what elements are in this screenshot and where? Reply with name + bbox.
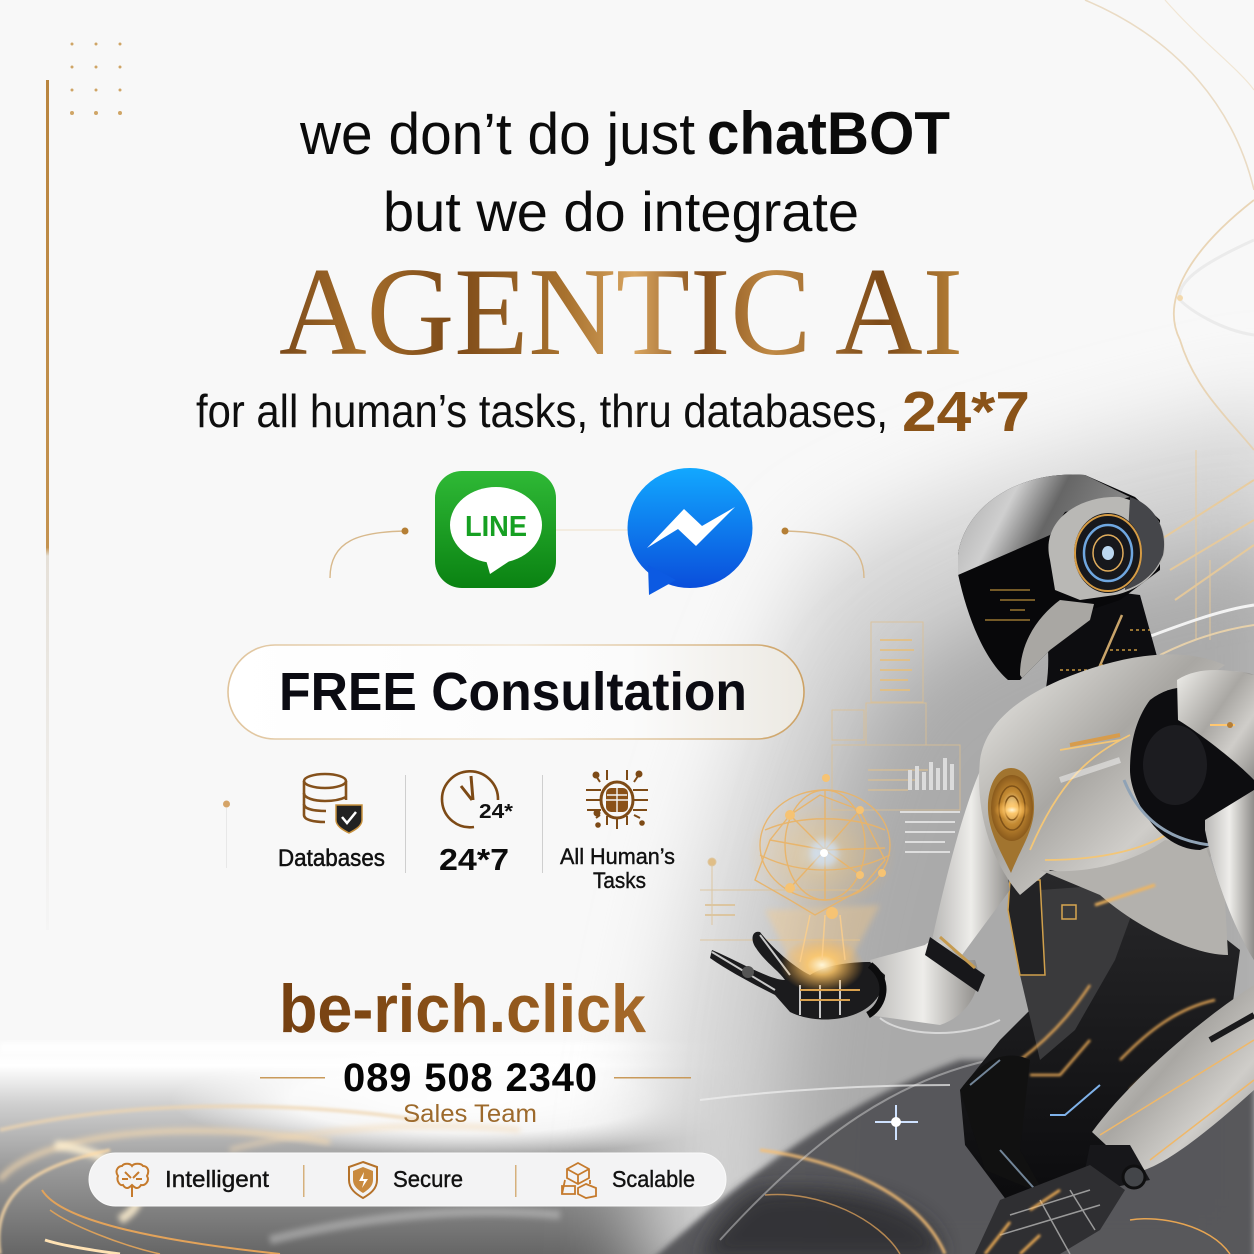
robot: open hand (710, 932, 885, 1020)
robot: lower arm and hand (975, 985, 1254, 1254)
connector lines (330, 528, 864, 578)
website: be-rich.click (279, 971, 646, 1047)
data panels behind robot (700, 622, 960, 940)
icon: shield (349, 1162, 377, 1198)
feature: 24*7: 24*7 (439, 842, 509, 877)
feature: 24*7 (439, 771, 513, 877)
icon: brain (117, 1164, 148, 1197)
hologram globe (747, 774, 897, 993)
feature: All Human's Tasks: All Human’s (560, 844, 675, 869)
feature: Databases: Databases (278, 845, 385, 872)
icon: LINE (435, 471, 556, 588)
icon: LINE: LINE (465, 511, 527, 543)
right background light streaks (1140, 450, 1254, 655)
headline (299, 100, 950, 243)
bottom pill (89, 1153, 726, 1206)
robot: neck (1020, 590, 1170, 760)
title: AGENTIC AI: AGENTIC AI (279, 243, 963, 382)
icon: Messenger (628, 468, 752, 595)
robot: rear arm (1177, 671, 1254, 960)
robot: chest emblem (960, 768, 1080, 873)
light flare (875, 1105, 918, 1140)
feature: Databases (278, 774, 385, 872)
floor with swirling light (0, 1060, 1254, 1254)
headline: chatBOT (707, 100, 950, 167)
phone number: 089 508 2340 (343, 1056, 597, 1100)
robot: near arm (868, 760, 1010, 1033)
bottom pill: Secure (393, 1166, 463, 1192)
bottom pill: Intelligent (165, 1166, 270, 1192)
icon: boxes (562, 1163, 596, 1198)
headline: but we do integrate (383, 180, 859, 243)
dot grid (70, 42, 122, 115)
subtitle: 24*7 (902, 380, 1030, 444)
robot: ear ring (1074, 513, 1142, 593)
left accent dot (223, 800, 230, 868)
robot: helmet (958, 475, 1165, 680)
sales team label: Sales Team (403, 1100, 537, 1128)
subtitle: for all human’s tasks, thru databases, (196, 385, 888, 437)
robot: dark torso (960, 840, 1240, 1205)
icon: clock: 24* (479, 801, 513, 823)
feature: All Human's Tasks (560, 770, 675, 893)
dark swoop under the robot (640, 1060, 1254, 1254)
pill: FREE Consultation: FREE Consultation (279, 662, 747, 722)
robot (710, 475, 1254, 1254)
headline: we don’t do just (299, 102, 695, 167)
left vertical gold line (46, 80, 49, 930)
bottom pill: Scalable (612, 1166, 695, 1192)
robot: shoulder joint (1124, 670, 1254, 960)
top right decorative curves (1085, 0, 1254, 450)
pill: FREE Consultation (228, 645, 804, 739)
robot: chest plate (979, 654, 1228, 955)
icon: database shield (304, 774, 362, 833)
feature: All Human's Tasks: Tasks (593, 868, 646, 893)
icon: chip brain (586, 770, 648, 829)
grey haze behind robot (640, 400, 1254, 1254)
